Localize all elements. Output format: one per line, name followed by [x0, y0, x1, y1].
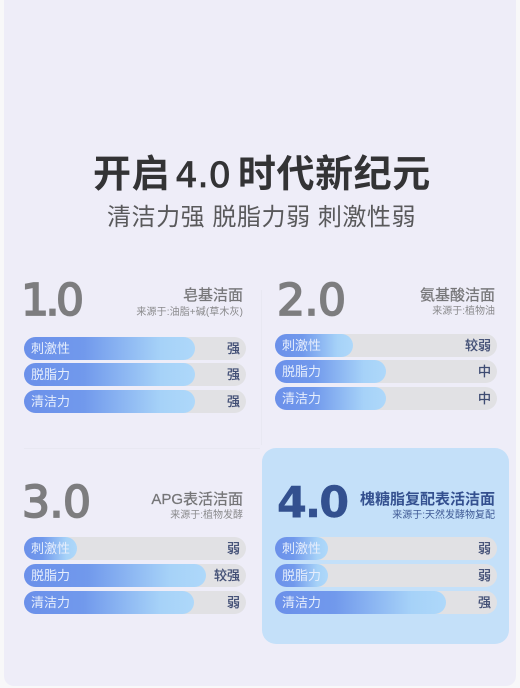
- bar: degreasing: [275, 360, 497, 383]
- source note: 来源于:植物油: [432, 306, 495, 317]
- bar: cleansing: 清洁力: [282, 595, 321, 610]
- source note: 来源于:天然发酵物复配: [392, 510, 495, 521]
- bar: cleansing: [24, 591, 246, 614]
- bar: irritation: 刺激性: [31, 341, 70, 356]
- panel: 2.0 amino acid cleanser: [275, 275, 497, 410]
- bar: cleansing: [24, 390, 246, 413]
- product name: 皂基洁面: [183, 287, 243, 304]
- bar: irritation: 弱: [227, 541, 240, 556]
- product name: APG表活洁面: [151, 491, 243, 508]
- panel: 4.0 highlighted cleanser: [262, 448, 509, 644]
- product name: 氨基酸洁面: [420, 287, 495, 304]
- bar: degreasing: 脱脂力: [282, 364, 321, 379]
- version number 4.0: 4.0: [277, 478, 347, 528]
- bar: degreasing: 弱: [478, 568, 491, 583]
- bar: cleansing: 弱: [227, 595, 240, 610]
- bar: irritation: 弱: [478, 541, 491, 556]
- bar: irritation: 刺激性: [282, 541, 321, 556]
- bar: degreasing: [24, 363, 246, 386]
- bar: cleansing: 清洁力: [31, 595, 70, 610]
- bar: cleansing: 强: [478, 595, 491, 610]
- bar: irritation: 较弱: [465, 338, 491, 353]
- bar: cleansing: [275, 591, 497, 614]
- panel: 3.0 APG cleanser: [22, 477, 246, 614]
- bar: irritation: 刺激性: [282, 338, 321, 353]
- version number 3.0: 3.0: [22, 477, 90, 528]
- source note: 来源于:油脂+碱(草木灰): [136, 307, 243, 318]
- bar: degreasing: 脱脂力: [31, 568, 70, 583]
- bar: cleansing: 强: [227, 394, 240, 409]
- bar: cleansing: 清洁力: [282, 391, 321, 406]
- bar: degreasing: [275, 564, 497, 587]
- product name: 槐糖脂复配表活洁面: [360, 491, 495, 508]
- bar: degreasing: 脱脂力: [282, 568, 321, 583]
- bar: degreasing: 中: [478, 364, 491, 379]
- bar: irritation: 刺激性: [31, 541, 70, 556]
- bar: degreasing: 脱脂力: [31, 367, 70, 382]
- bar: cleansing: [275, 387, 497, 410]
- bar: irritation: 强: [227, 341, 240, 356]
- bar: cleansing: 清洁力: [31, 394, 70, 409]
- subtitle: 清洁力强 脱脂力弱 刺激性弱: [107, 204, 416, 231]
- version number 1.0: 1.0: [21, 275, 80, 326]
- bar: irritation: [24, 537, 246, 560]
- bar: degreasing: 强: [227, 367, 240, 382]
- title: 开启4.0时代新纪元: [93, 154, 431, 196]
- bar: irritation: [24, 337, 246, 360]
- bar: degreasing: 较强: [214, 568, 240, 583]
- bar: irritation: [275, 334, 497, 357]
- source note: 来源于:植物发酵: [170, 510, 243, 521]
- version number 2.0: 2.0: [277, 275, 345, 326]
- bar: degreasing: [24, 564, 246, 587]
- bar: cleansing: 中: [478, 391, 491, 406]
- bar: irritation: [275, 537, 497, 560]
- panel: 1.0 soap-based cleanser: [21, 275, 246, 413]
